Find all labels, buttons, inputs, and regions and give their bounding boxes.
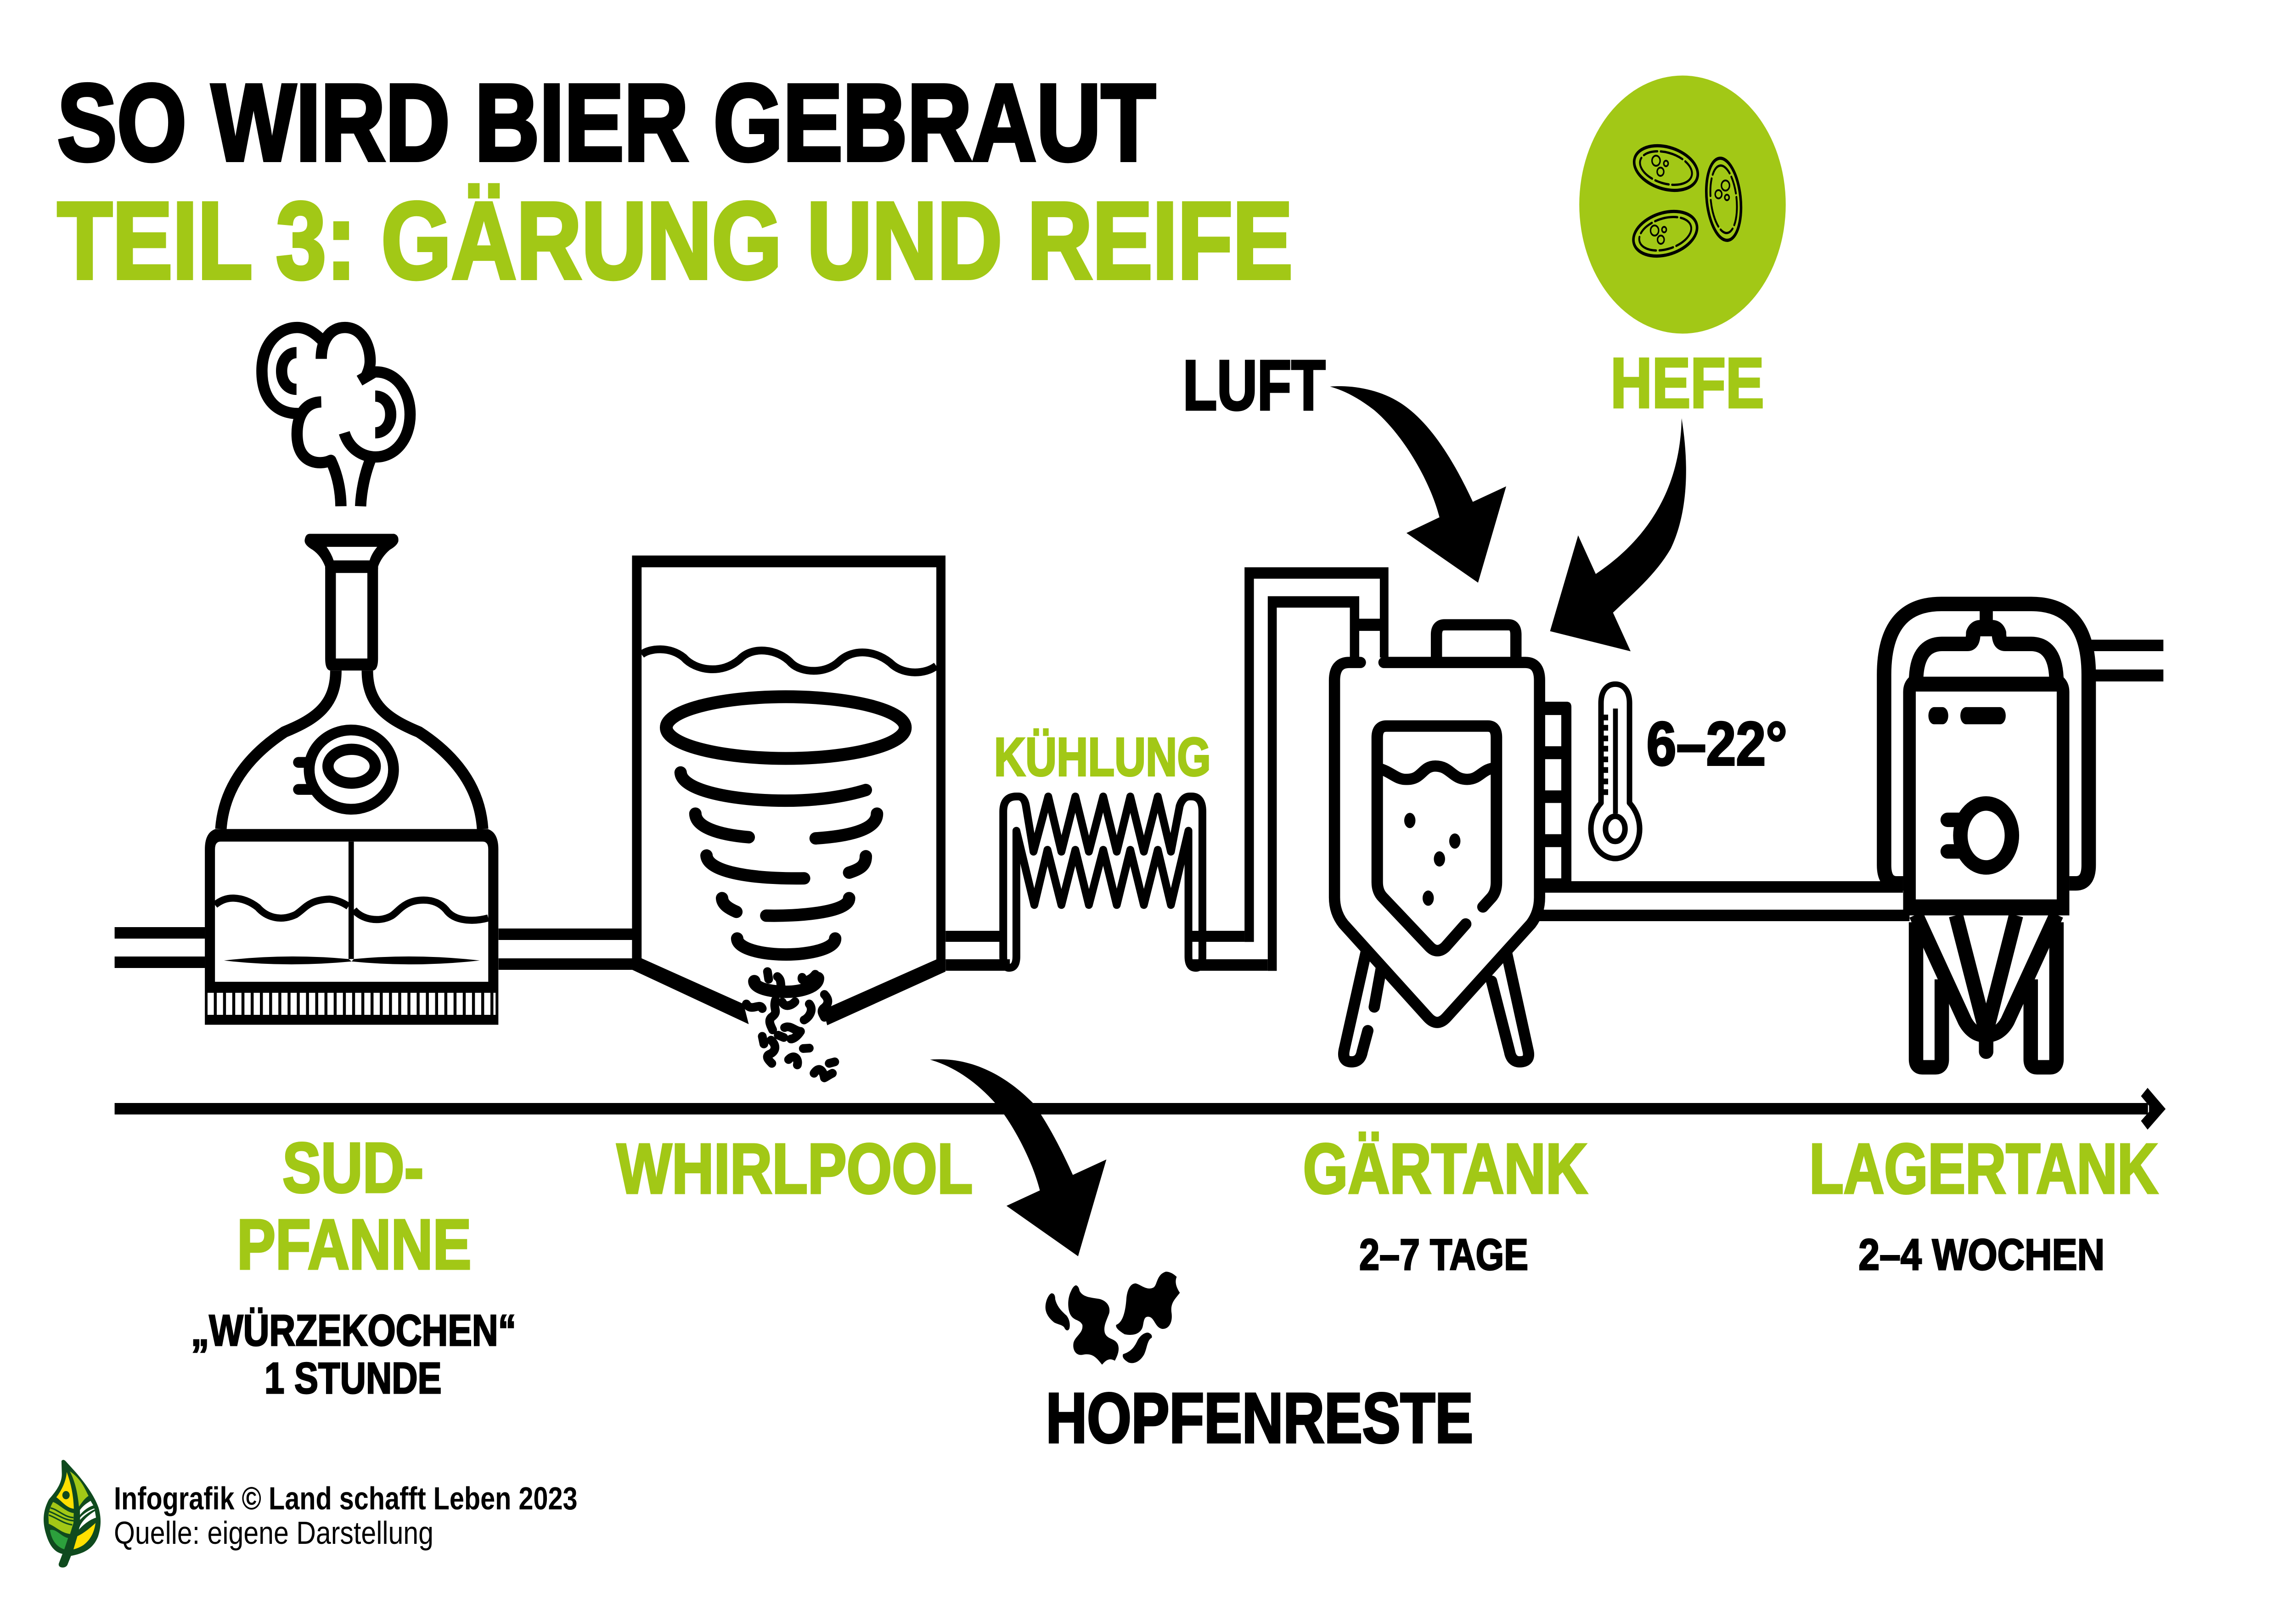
dome [1916,627,2056,682]
inner vessel [1377,726,1497,951]
central shaft [349,842,354,959]
timeline arrow [115,1088,2166,1130]
title: SO WIRD BIER GEBRAUT [57,62,1156,184]
yeast cell 2 [1702,155,1745,243]
icon: whirlpool tank [632,556,945,1078]
kettle neck [325,564,378,670]
icon: brew kettle [205,327,498,1025]
label: fermentation tank: GÄRTANK [1303,1129,1587,1208]
icon: storage tank [1884,604,2089,1067]
icon: fermentation tank [1244,567,1640,1062]
note: brew kettle [191,1306,516,1403]
note: brew kettle: 1 STUNDE [264,1354,442,1403]
tank body [1903,677,2069,915]
label: whirlpool: WHIRLPOOL [617,1129,973,1208]
icon: cooling coil [1003,797,1202,968]
icon: thermometer [1591,684,1640,859]
logo: leaf [44,1460,101,1568]
kettle base [205,829,498,1025]
legs [1916,922,2056,1067]
air and cooling pipes [1244,567,1389,971]
legs [1344,952,1529,1062]
duration: storage: 2–4 WOCHEN [1858,1230,2105,1279]
vortex [666,697,905,992]
connecting pipes [115,640,2163,971]
icon: hop residue [1046,1272,1180,1365]
yeast label: HEFE [1610,343,1764,422]
source line: Quelle: eigene Darstellung [114,1515,433,1551]
manhole [298,730,394,809]
air label: LUFT [1183,346,1325,425]
subtitle: TEIL 3: GÄRUNG UND REIFE [57,180,1293,302]
hop sediment [746,972,835,1078]
cooling label: KÜHLUNG [994,726,1211,787]
label: brew kettle: PFANNE [237,1205,471,1284]
top connector [1980,604,1993,636]
temperature label: 6–22° [1647,709,1787,778]
label: brew kettle [237,1128,471,1284]
label: storage tank: LAGERTANK [1809,1129,2158,1208]
kettle dome [221,670,483,829]
note: brew kettle: „WÜRZEKOCHEN“ [191,1306,516,1355]
cooling jacket [1884,604,2089,883]
icon: yeast circle [1579,75,1786,333]
arrow: yeast [1550,418,1686,651]
gauge slots [1928,707,2006,724]
cone [1916,915,2056,1052]
manway [1948,804,2012,867]
label: hop residue: HOPFENRESTE [1046,1379,1473,1457]
liquid surface [642,649,936,672]
liquid surface [215,898,488,920]
bubbles [1404,813,1460,906]
duration: fermentation: 2–7 TAGE [1359,1230,1528,1279]
arrow: hop residue [930,1059,1106,1256]
arrow: air [1330,386,1506,583]
liquid [1377,766,1497,779]
stirrer blade [224,957,480,964]
yeast cell 1 [1631,139,1701,197]
lid [1436,625,1516,658]
kettle heater grille [208,993,495,1015]
yeast cell 3 [1630,205,1700,263]
side cooling panel [1545,702,1571,882]
credit line: Infografik © Land schafft Leben 2023 [114,1481,578,1516]
steam cloud [262,327,410,506]
tank shell [632,556,945,1025]
kettle funnel top [304,534,399,569]
tank body [1334,663,1540,1023]
label: brew kettle: SUD- [282,1128,423,1207]
